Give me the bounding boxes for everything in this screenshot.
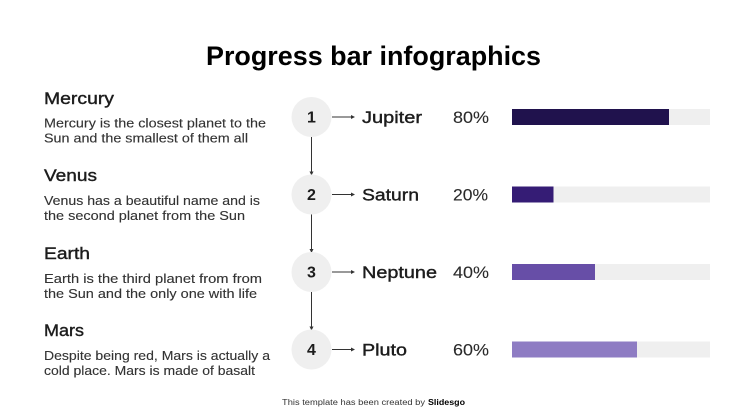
row 1: Jupiter: [292, 97, 710, 137]
text block: Venus: [44, 166, 260, 223]
progress track: [512, 342, 710, 358]
value 80%: 80%: [453, 108, 489, 127]
label Pluto: Pluto: [362, 340, 407, 360]
step circle 3: [292, 252, 332, 292]
text block: Mercury: Mercury is the closest planet to the: [44, 116, 266, 130]
arrow to Neptune: [332, 270, 355, 274]
value 40%: 40%: [453, 263, 489, 282]
value 60%: 60%: [453, 340, 489, 360]
text block: Venus: Venus has a beautiful name and is: [44, 194, 260, 208]
arrow: 1 to 2: [310, 137, 314, 176]
arrow to Jupiter: [332, 115, 355, 119]
text block: Earth: the Sun and the only one with life: [44, 287, 257, 301]
text block: Mars: [44, 321, 270, 378]
progress fill 20%: [512, 186, 554, 202]
row 4: Pluto: [292, 330, 710, 370]
text block: Earth: Earth: [44, 244, 90, 263]
footer credit: Slidesgo: [428, 398, 465, 407]
value 20%: 20%: [453, 186, 488, 204]
text block: Venus: the second planet from the Sun: [44, 209, 245, 223]
step number 3: 3: [307, 264, 316, 282]
label Jupiter: Jupiter: [362, 108, 422, 127]
step number 2: 2: [307, 187, 316, 204]
progress fill 80%: [512, 109, 669, 125]
text block: Mars: Mars: [44, 321, 84, 340]
arrow to Pluto: [332, 348, 355, 352]
text block: Earth: Earth is the third planet from from: [44, 272, 262, 286]
text block: Mars: cold place. Mars is made of basalt: [44, 364, 256, 378]
label Saturn: Saturn: [362, 186, 419, 204]
footer credit: This template has been created by: [282, 398, 425, 407]
label Neptune: Neptune: [362, 263, 437, 282]
text block: Venus: Venus: [44, 166, 97, 185]
title: Progress bar infographics: [206, 41, 541, 71]
progress track: [512, 186, 710, 202]
progress track: [512, 264, 710, 280]
text block: Mercury: Sun and the smallest of them all: [44, 132, 248, 146]
arrow to Saturn: [332, 192, 355, 196]
text block: Mars: Despite being red, Mars is actually a: [44, 349, 270, 363]
step circle 2: [292, 174, 332, 214]
row 3: Neptune: [292, 252, 710, 292]
arrow: 2 to 3: [310, 214, 314, 253]
text block: Earth: [44, 244, 262, 301]
footer credit: [282, 398, 465, 407]
row 2: Saturn: [292, 174, 710, 214]
arrow: 3 to 4: [310, 292, 314, 330]
step number 4: 4: [307, 342, 316, 359]
progress track: [512, 109, 710, 125]
progress fill 40%: [512, 264, 595, 280]
step circle 1: [292, 97, 332, 137]
text block: Mercury: Mercury: [44, 89, 115, 108]
step circle 4: [292, 330, 332, 370]
text block: Mercury: [44, 89, 266, 146]
step number 1: 1: [307, 110, 316, 126]
progress fill 60%: [512, 342, 637, 358]
